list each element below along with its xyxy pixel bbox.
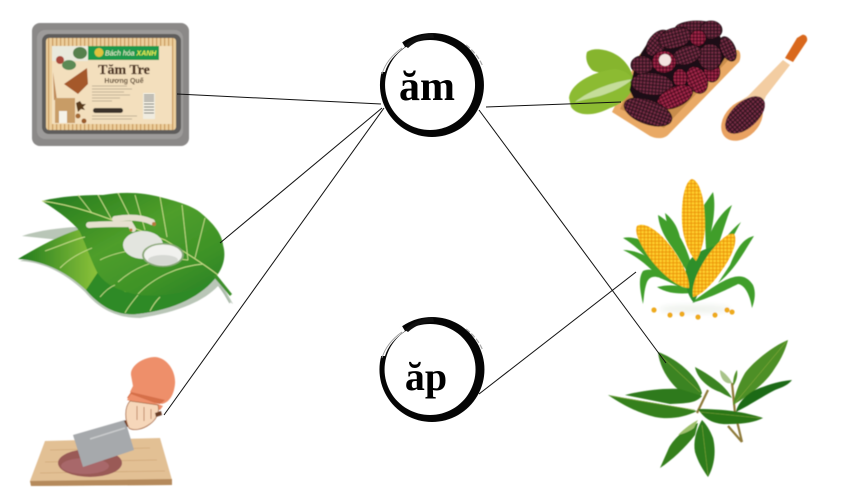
- label: ăp: [405, 354, 447, 399]
- label: brand name: Bách hóa XANH: [105, 50, 157, 58]
- berries: [620, 21, 740, 132]
- green leaves: [586, 49, 633, 80]
- husk leaves: [623, 192, 755, 308]
- brush ring: [378, 317, 484, 422]
- brush ring: [378, 33, 484, 137]
- hand: [126, 401, 159, 430]
- wooden spoon: [713, 35, 807, 149]
- connector lines: [164, 94, 666, 415]
- illustration: corn cobs: [623, 179, 755, 320]
- minced meat: [58, 449, 122, 477]
- sleeve: [130, 357, 175, 404]
- corn shadow: [659, 305, 731, 313]
- node: ăm: [378, 33, 484, 137]
- photo: mulberries on wooden tray: [569, 21, 807, 149]
- label: ăm: [399, 64, 455, 110]
- silkworms: [89, 218, 156, 232]
- wooden tray: [612, 50, 740, 138]
- illustration: hand chopping meat with cleaver: [30, 357, 175, 486]
- photo: Vietnamese coriander sprigs: [608, 340, 792, 477]
- cleaver: [73, 420, 134, 467]
- leaves: [608, 340, 792, 477]
- cutting board: [30, 438, 172, 486]
- corn kernels: [651, 307, 735, 320]
- silk cocoons: [123, 231, 184, 267]
- cobs: [636, 179, 735, 297]
- illustration: silkworms on mulberry leaf: [18, 193, 233, 318]
- label: flavour: Hương Quế: [104, 77, 144, 85]
- node: ăp: [378, 317, 484, 422]
- photo: toothpick pack: [32, 23, 189, 146]
- label: product name: Tăm Tre: [98, 63, 150, 78]
